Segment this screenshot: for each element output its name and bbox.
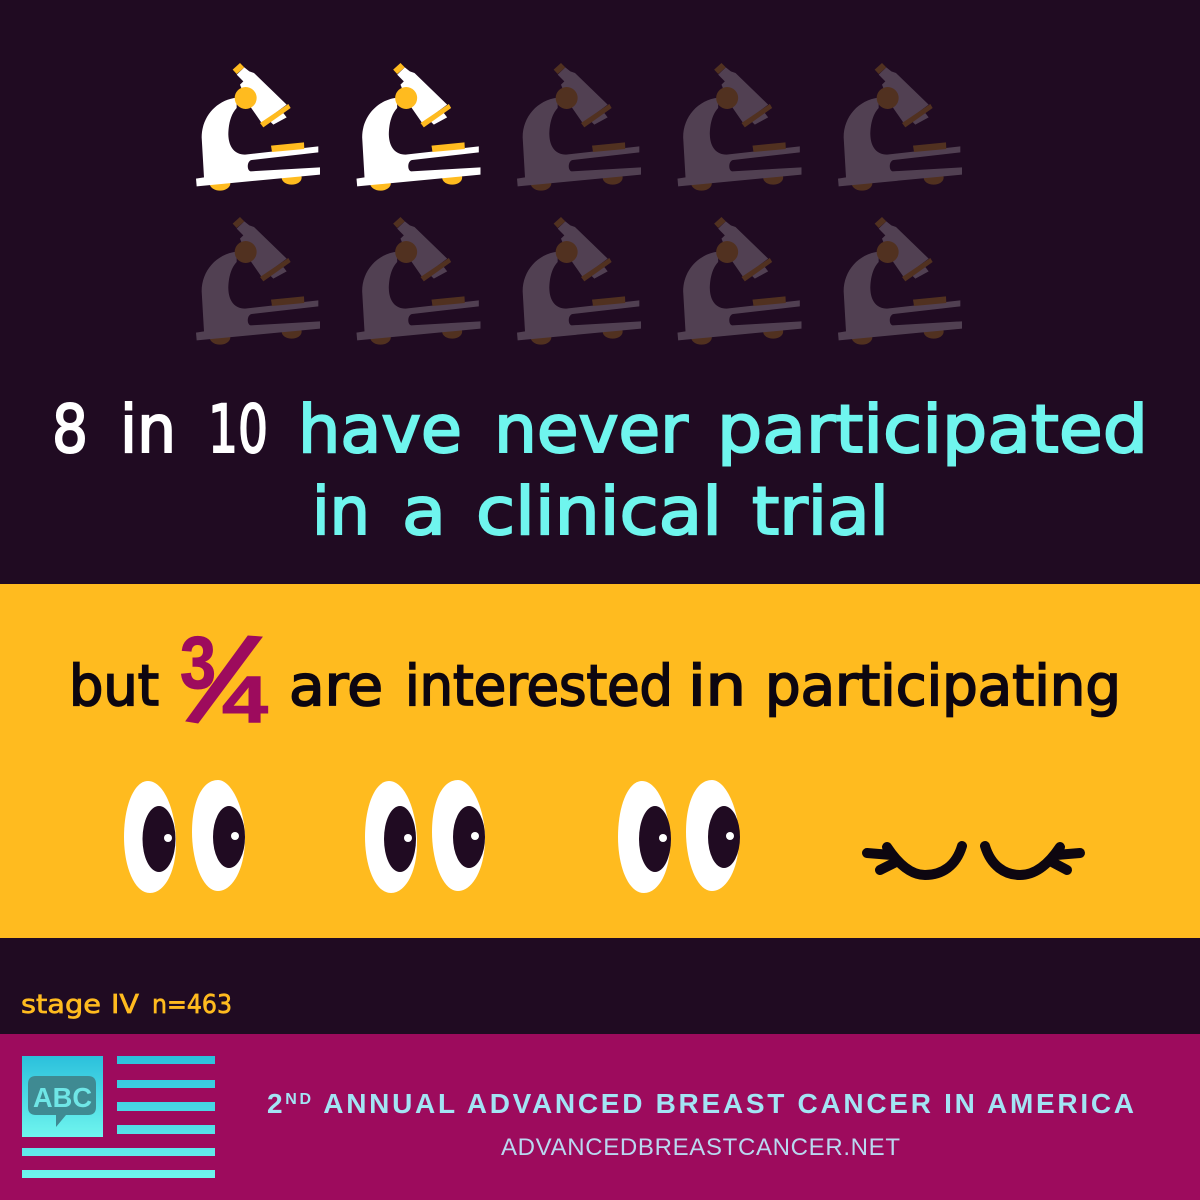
footer url: ADVANCEDBREASTCANCER.NET [501, 1134, 900, 1161]
heading: 8 in 10 have never participated: have [298, 391, 462, 468]
heading: 8 in 10 have never participated [52, 391, 1148, 468]
footer title: ANNUAL ADVANCED BREAST CANCER IN AMERICA [314, 1088, 1134, 1119]
heading: 8 in 10 have never participated: in [120, 391, 176, 468]
heading: in a clinical trial: in [312, 473, 370, 550]
heading: in a clinical trial [312, 473, 889, 550]
fraction: three quarters: 3 [180, 621, 216, 704]
text: are interested in participating: participating [765, 654, 1121, 719]
note: sample size: IV [111, 990, 139, 1020]
icon: open eyes 1 [124, 780, 245, 893]
heading: 8 in 10 have never participated: 8 [52, 391, 88, 468]
icon: closed eyes [867, 846, 1080, 875]
heading: in a clinical trial: clinical [476, 473, 722, 550]
icon: open eyes 2 [365, 780, 485, 893]
footer title: 2 [267, 1088, 283, 1119]
note: sample size: stage [21, 990, 101, 1020]
logo: ABC flag [22, 1056, 215, 1178]
text: but: but [69, 654, 159, 719]
heading: 8 in 10 have never participated: 10 [208, 391, 268, 468]
text: are interested in participating: interested [405, 654, 673, 719]
heading: in a clinical trial: trial [752, 473, 889, 550]
logo: ABC flag: ABC [33, 1082, 92, 1113]
icon: open eyes 3 [618, 780, 740, 893]
heading: 8 in 10 have never participated: participated [717, 391, 1148, 468]
fraction: three quarters: 4 [222, 662, 268, 736]
heading: in a clinical trial: a [402, 473, 446, 550]
text: are interested in participating [289, 654, 1121, 719]
panel: footer [0, 1034, 1200, 1200]
fraction: three quarters [180, 621, 268, 736]
note: sample size [21, 990, 232, 1020]
footer title: ND [285, 1091, 311, 1108]
panel: interest band [0, 584, 1200, 938]
heading: 8 in 10 have never participated: never [494, 391, 689, 468]
pictogram: microscopes 2 of 10 highlighted [196, 63, 962, 345]
text: are interested in participating: are [289, 654, 383, 719]
text: are interested in participating: in [688, 654, 746, 719]
note: sample size: n=463 [152, 990, 232, 1020]
